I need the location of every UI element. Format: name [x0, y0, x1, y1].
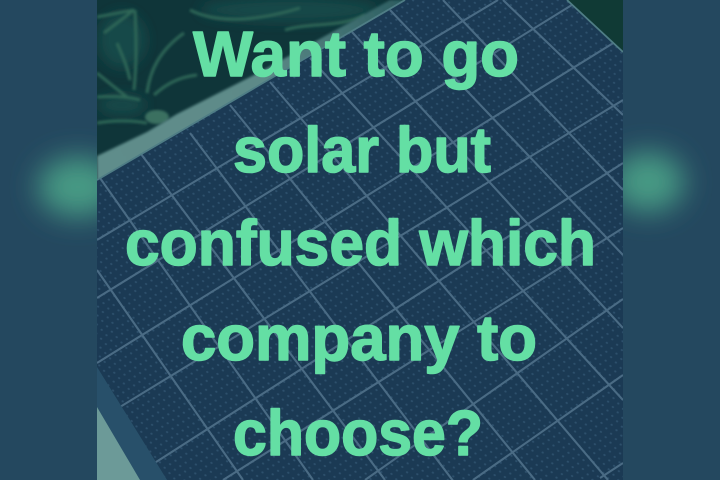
photo: solar panel with plants: [97, 0, 623, 480]
panel upper edge line: [97, 0, 623, 180]
ground corner: [97, 407, 140, 480]
line 5: choose?: [233, 397, 483, 469]
plant background: [97, 0, 623, 190]
headline text: [125, 18, 596, 469]
solar cell grid lines: [97, 0, 623, 480]
solar cell surface: [97, 0, 623, 480]
line 4: company to: [181, 302, 537, 374]
panel lower side edge: [97, 367, 167, 480]
line 2: solar but: [233, 114, 491, 186]
line 3: confused which: [125, 207, 596, 279]
line 1: Want to go: [193, 18, 519, 90]
blurred right side panel: [623, 137, 698, 227]
panel frame strip: [97, 0, 420, 184]
blurred left side panel: [24, 142, 97, 232]
